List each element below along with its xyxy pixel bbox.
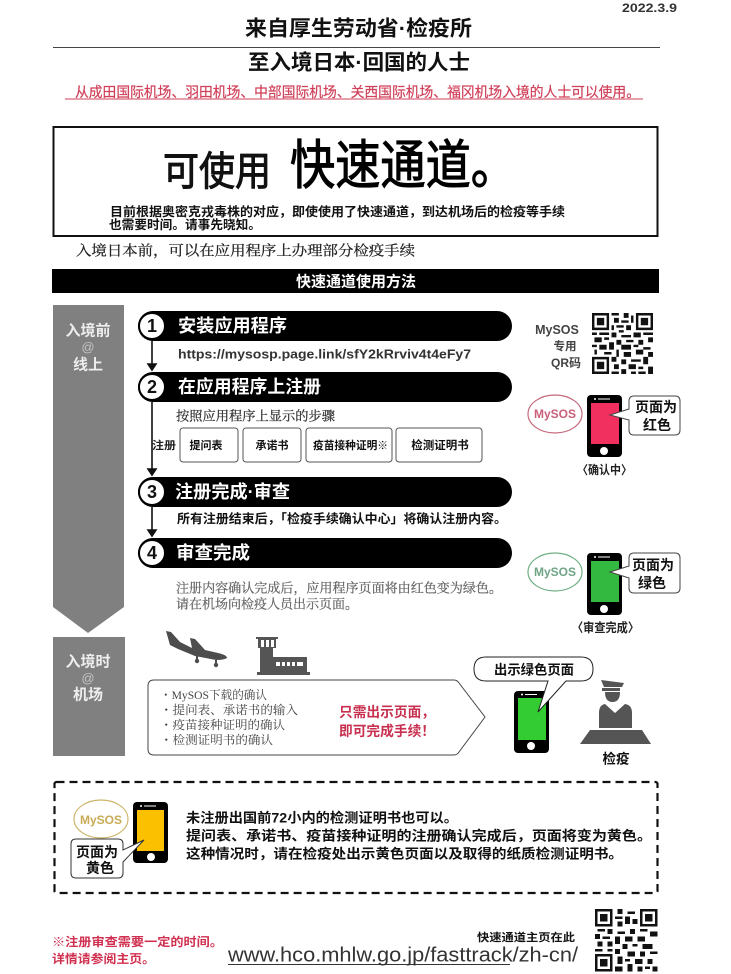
MySOS QR label: MySOS — [535, 323, 579, 337]
step 1: https://mysosp.page.link/sfY2kRrviv4t4eFy7 — [178, 346, 471, 362]
pledge box: 承诺书 — [256, 438, 288, 452]
checklist — [160, 687, 298, 747]
questionnaire box — [180, 428, 238, 462]
panel: airport checklist — [148, 680, 485, 755]
red slogan: 只需出示页面， — [339, 704, 435, 720]
omicron note: 也需要时间。请事先晓知。 — [109, 217, 261, 232]
step 3: 注册完成·审查 — [175, 481, 290, 502]
homepage label: 快速通道主页在此 — [477, 930, 575, 944]
callout: yellow page: 黄色 — [86, 860, 114, 876]
step 4: 注册内容确认完成后，应用程序页面将由红色变为绿色。 — [176, 580, 502, 596]
step 3 — [138, 477, 512, 526]
callout: yellow page: 页面为 — [76, 844, 118, 860]
callout: red page: 红色 — [643, 417, 671, 433]
step 2 — [138, 372, 512, 462]
callout: green page — [610, 553, 680, 593]
intro text: 入境日本前，可以在应用程序上办理部分检疫手续 — [76, 242, 415, 260]
step 2: 按照应用程序上显示的步骤 — [176, 408, 335, 424]
arrow: step 1 to 2 — [148, 341, 156, 370]
test certificate box — [396, 428, 482, 462]
headline — [163, 136, 516, 196]
icon: phone yellow screen — [133, 802, 168, 863]
panel: before entry arrow — [53, 305, 124, 633]
callout: yellow page — [71, 839, 144, 878]
yellow page explanation: 未注册出国前72小内的检测证明书也可以。 — [186, 810, 458, 826]
test certificate box: 检测证明书 — [411, 438, 469, 452]
icon: MySOS red oval: MySOS — [534, 407, 576, 421]
step 4: 审查完成 — [176, 542, 250, 563]
checklist: ・MySOS下载的确认 — [160, 687, 267, 702]
panel: before entry arrow: 线上 — [73, 356, 103, 374]
footnote: 详情请参阅主页。 — [52, 951, 155, 966]
caption: review complete: 〈审查完成〉 — [572, 620, 639, 635]
callout: show green page — [474, 657, 593, 712]
vaccine certificate box: 疫苗接种证明※ — [313, 438, 388, 452]
icon: MySOS yellow oval: MySOS — [80, 813, 122, 827]
subtitle: 至入境日本·回国的人士 — [248, 52, 470, 74]
icon: quarantine officer — [580, 680, 651, 744]
date: 2022.3.9 — [622, 3, 677, 15]
vaccine certificate box — [306, 428, 392, 462]
homepage URL: www.hco.mhlw.go.jp/fasttrack/zh-cn/ — [227, 944, 578, 966]
caption: confirming: 〈确认中〉 — [577, 462, 632, 477]
panel: at entry block: @ — [81, 670, 95, 686]
icon: homepage QR code — [595, 909, 658, 972]
callout: show green page: 出示绿色页面 — [494, 662, 574, 678]
yellow page explanation: 提问表、承诺书、疫苗接种证明的注册确认完成后，页面将变为黄色。 — [186, 828, 652, 844]
questionnaire box: 提问表 — [190, 438, 222, 452]
headline: 快速通道。 — [290, 136, 516, 196]
MySOS QR label: QR码 — [551, 356, 581, 370]
callout: red page — [610, 396, 680, 435]
icon: phone green page — [514, 691, 549, 753]
checklist: ・提问表、承诺书的输入 — [160, 702, 298, 717]
footnote: ※注册审查需要一定的时间。 — [52, 934, 223, 949]
panel: at entry block: 入境时 — [65, 652, 111, 670]
panel: before entry arrow: 入境前 — [65, 322, 111, 340]
icon: MySOS yellow oval — [74, 800, 128, 838]
step 2: 2 — [147, 377, 157, 397]
checklist: ・疫苗接种证明的确认 — [160, 717, 285, 732]
yellow page explanation — [186, 810, 652, 862]
airports notice: 从成田国际机场、羽田机场、中部国际机场、关西国际机场、福冈机场入境的人士可以使用。 — [75, 84, 640, 100]
step 4 — [138, 538, 512, 612]
arrow: step 3 to 4 — [148, 507, 156, 536]
MySOS green status — [528, 553, 680, 635]
headline: 可使用 — [163, 150, 271, 194]
red slogan — [339, 704, 435, 739]
callout: green page: 绿色 — [638, 575, 666, 591]
section header — [52, 269, 659, 293]
omicron note: 目前根据奥密克戎毒株的对应，即使使用了快速通道，到达机场后的检疫等手续 — [110, 204, 566, 219]
icon: phone green screen — [587, 553, 622, 615]
panel: before entry arrow: @ — [81, 340, 95, 354]
icon: phone red screen — [587, 395, 622, 457]
step 2: 注册 — [152, 438, 176, 452]
icon: MySOS green oval — [528, 553, 582, 591]
caption: quarantine: 检疫 — [602, 750, 630, 766]
icon: airplane — [166, 631, 227, 667]
panel: at entry block: 机场 — [73, 686, 103, 704]
section header: 快速通道使用方法 — [296, 272, 416, 290]
icon: MySOS QR code — [592, 313, 653, 374]
step 3: 所有注册结束后，「检疫手续确认中心」将确认注册内容。 — [177, 511, 507, 526]
callout: green page: 页面为 — [632, 557, 674, 573]
icon: MySOS red oval — [528, 395, 582, 433]
panel: at entry block — [53, 637, 125, 756]
step 1: 1 — [147, 316, 157, 336]
step 4: 4 — [147, 543, 157, 563]
yellow page explanation: 这种情况时，请在检疫处出示黄色页面以及取得的纸质检测证明书。 — [186, 846, 623, 862]
callout: red page: 页面为 — [635, 399, 677, 415]
icon: airport tower — [256, 637, 310, 675]
MySOS QR label — [535, 323, 581, 370]
step 3: 3 — [147, 482, 157, 502]
step 2: 在应用程序上注册 — [178, 376, 321, 397]
step 4: 请在机场向检疫人员出示页面。 — [176, 596, 358, 612]
panel: fast track headline — [54, 127, 658, 236]
step 1 — [138, 311, 512, 362]
footnote — [52, 934, 223, 966]
omicron note — [109, 204, 566, 232]
step 1: 安装应用程序 — [178, 315, 287, 336]
title: 来自厚生劳动省·检疫所 — [245, 16, 472, 40]
arrow: step 2 to 3 — [148, 402, 156, 475]
MySOS QR label: 专用 — [554, 339, 576, 353]
panel: yellow page note — [54, 782, 658, 893]
red slogan: 即可完成手续！ — [339, 723, 435, 739]
checklist: ・检测证明书的确认 — [160, 732, 273, 747]
MySOS red status — [528, 395, 680, 477]
pledge box — [243, 428, 301, 462]
icon: MySOS green oval: MySOS — [534, 565, 576, 579]
